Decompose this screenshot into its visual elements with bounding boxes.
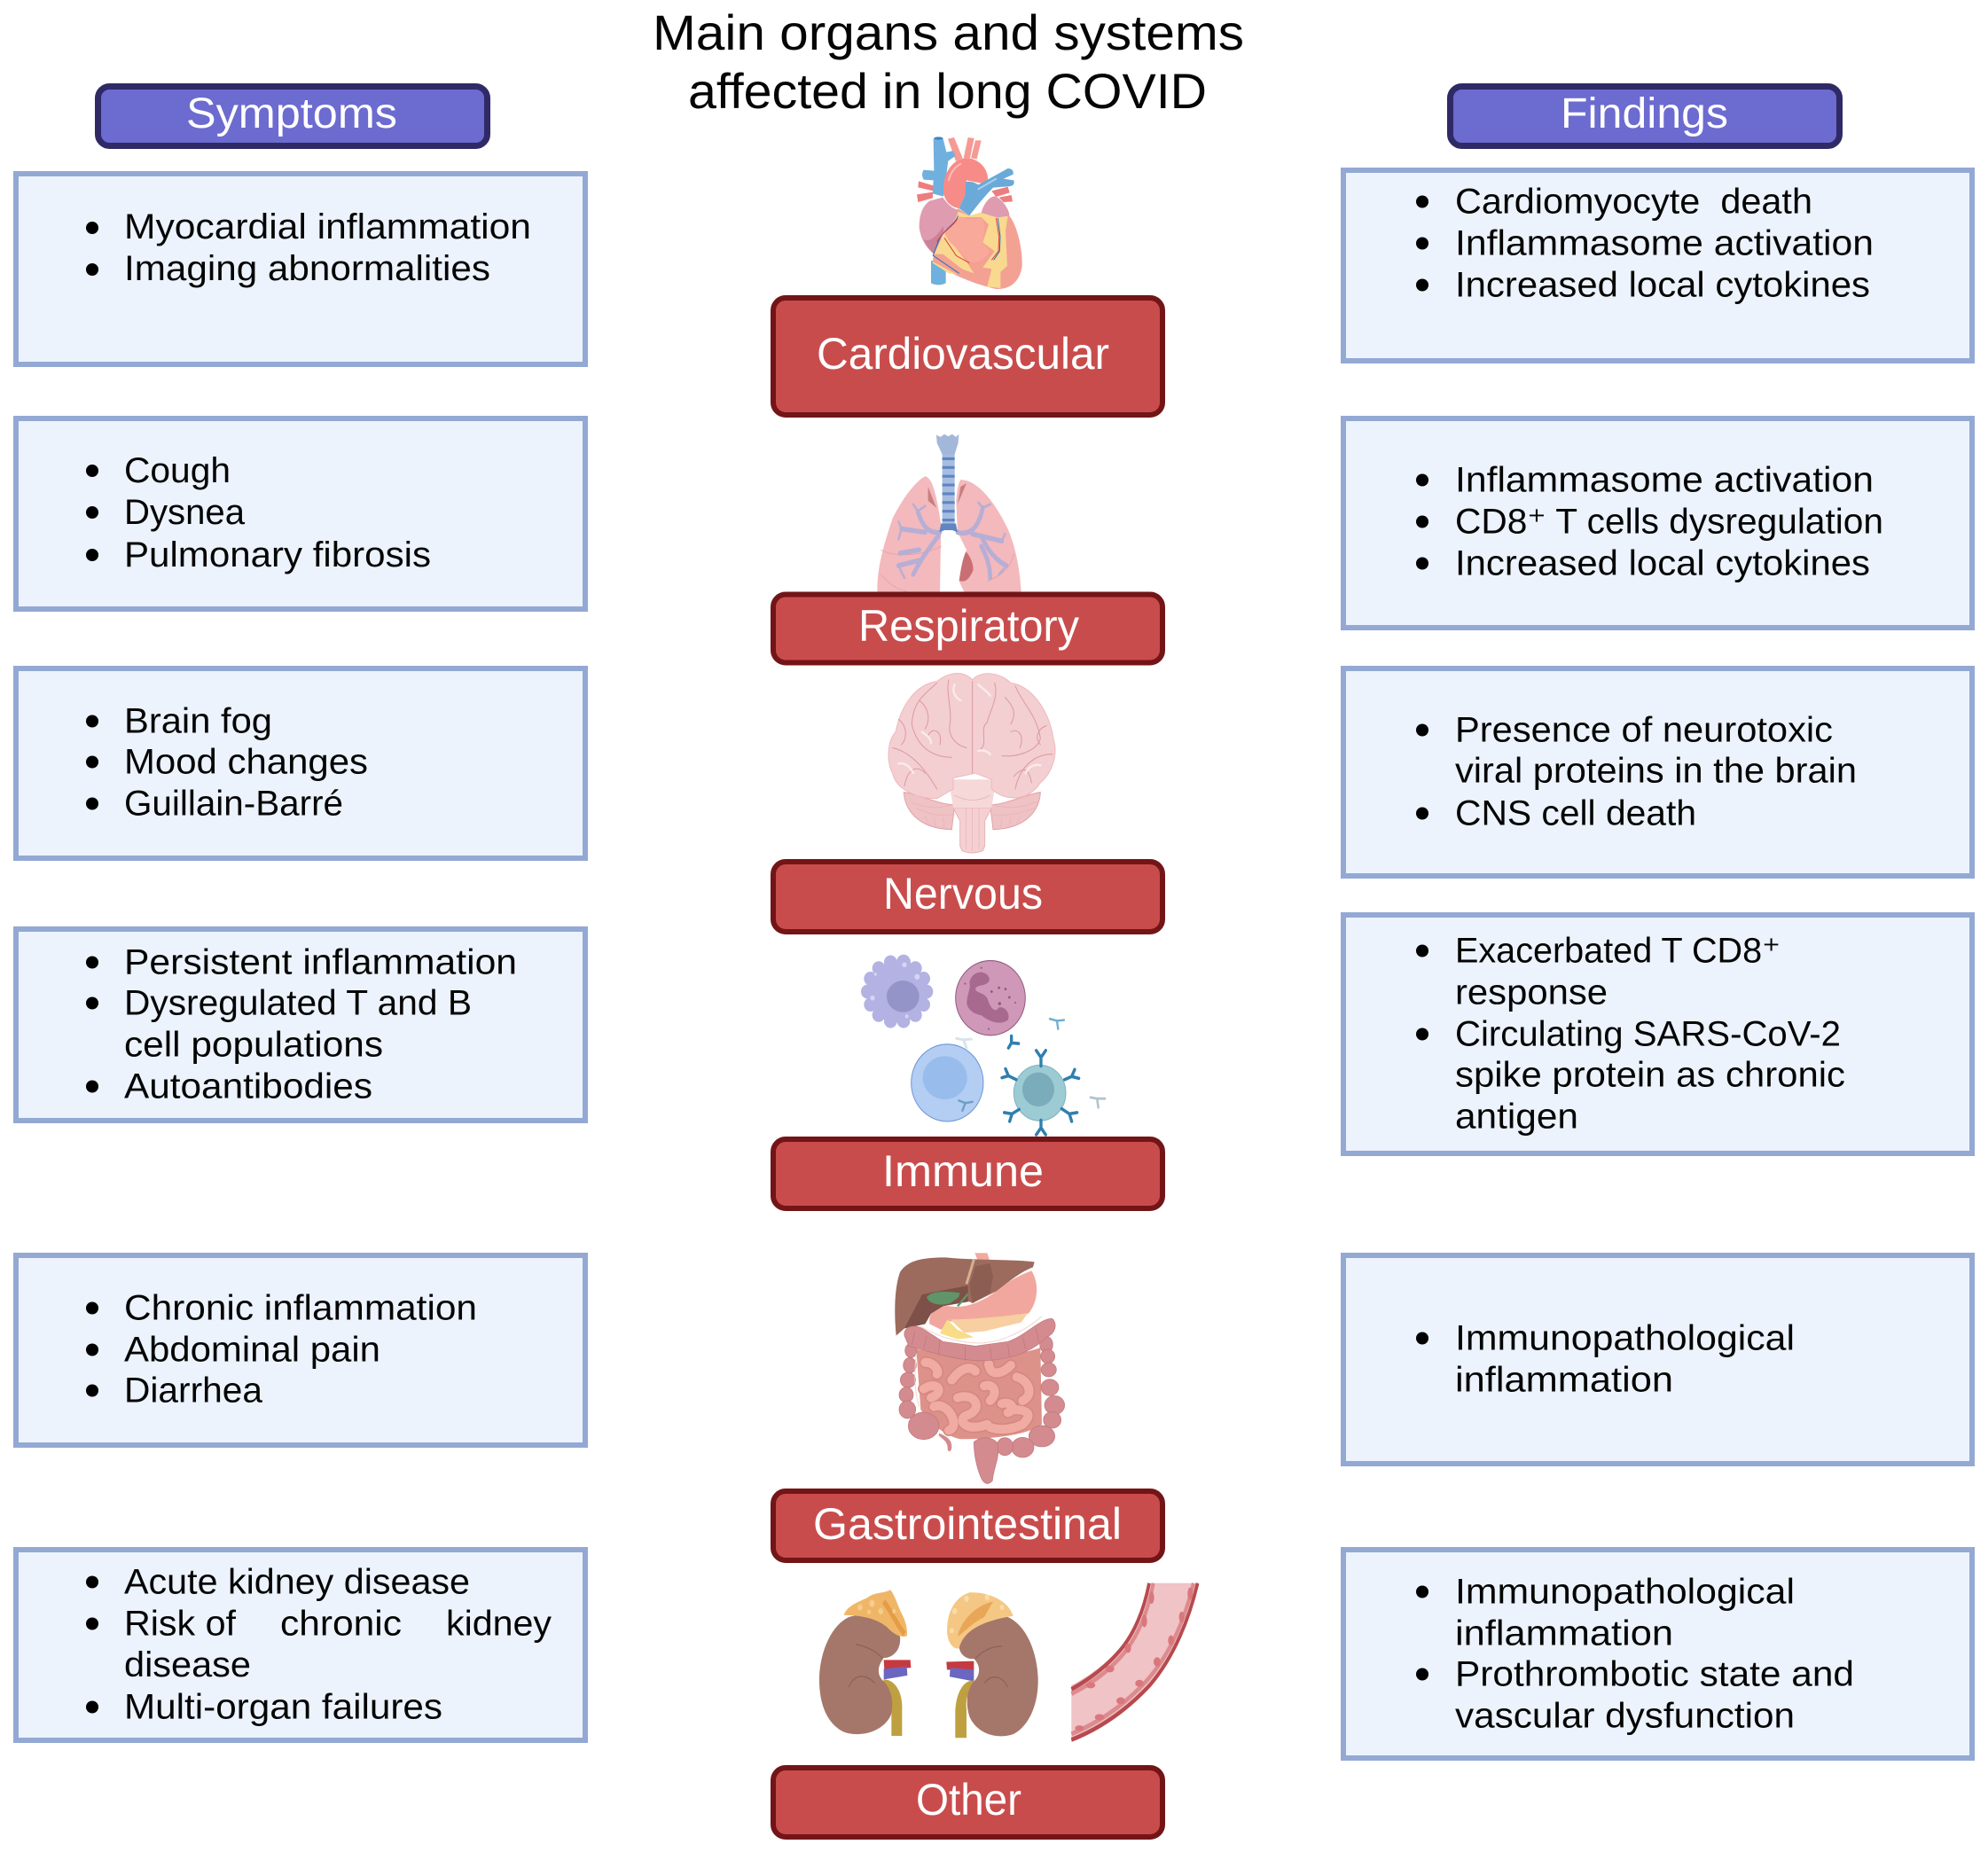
panel: other symptoms: disease: [124, 1645, 251, 1684]
panel: immune findings: spike protein as chronic: [1455, 1055, 1845, 1094]
left adrenal gland: [844, 1590, 907, 1637]
right adrenal gland: [947, 1592, 1014, 1649]
panel: cardiovascular findings: Cardiomyocyte death: [1455, 183, 1812, 222]
liver and gallbladder: [895, 1257, 1035, 1336]
panel: other findings: [1343, 1550, 1972, 1758]
panel: immune findings: [1343, 915, 1972, 1153]
right kidney: [959, 1616, 1038, 1736]
cell: plasma cell: [1014, 1065, 1066, 1121]
large intestine: [899, 1318, 1065, 1483]
panel: immune symptoms: Persistent inflammation: [124, 943, 517, 982]
panel: nervous symptoms: [16, 668, 585, 858]
panel: other findings: Prothrombotic state and: [1455, 1654, 1854, 1693]
label: Immune: [773, 1139, 1162, 1208]
stomach and pancreas: [929, 1270, 1037, 1340]
panel: nervous symptoms: Mood changes: [124, 743, 368, 782]
label: Respiratory: [773, 594, 1162, 663]
label: Cardiovascular: Cardiovascular: [817, 329, 1109, 379]
cell: macrophage: [861, 955, 933, 1028]
panel: respiratory symptoms: Dysnea: [124, 493, 246, 532]
panel: respiratory findings: [1343, 418, 1972, 628]
antibodies: [957, 1019, 1105, 1135]
panel: respiratory symptoms: Cough: [124, 451, 231, 490]
panel: cardiovascular symptoms: [16, 174, 585, 364]
panel: cardiovascular symptoms: Myocardial inflammation: [124, 207, 531, 246]
panel: nervous findings: CNS cell death: [1455, 794, 1696, 833]
panel: immune symptoms: cell populations: [124, 1025, 383, 1064]
panel: nervous findings: Presence of neurotoxic: [1455, 711, 1833, 750]
panel: other symptoms: Multi-organ failures: [124, 1688, 442, 1727]
panel: immune symptoms: [16, 929, 585, 1121]
panel: gastrointestinal symptoms: Diarrhea: [124, 1371, 263, 1410]
panel: other findings: inflammation: [1455, 1614, 1673, 1653]
label: Respiratory: Respiratory: [858, 601, 1079, 651]
panel: gastrointestinal symptoms: Chronic inflammation: [124, 1289, 477, 1328]
panel: other symptoms: Acute kidney disease: [124, 1562, 470, 1601]
panel: immune findings: response: [1455, 973, 1608, 1012]
panel: respiratory findings: CD8⁺ T cells dysregulation: [1455, 502, 1883, 541]
panel: other symptoms: [16, 1550, 585, 1740]
panel: other findings: vascular dysfunction: [1455, 1697, 1795, 1736]
heading: Symptoms: Symptoms: [186, 90, 397, 137]
panel: respiratory symptoms: Pulmonary fibrosis: [124, 535, 431, 574]
panel: immune findings: Exacerbated T CD8⁺: [1455, 931, 1781, 970]
heading: Findings: Findings: [1561, 90, 1728, 137]
cell: neutrophil: [956, 961, 1025, 1035]
title: [653, 4, 1244, 119]
label: Gastrointestinal: [773, 1491, 1162, 1560]
panel: immune findings: antigen: [1455, 1098, 1578, 1137]
panel: cardiovascular findings: Inflammasome activation: [1455, 223, 1874, 262]
panel: nervous findings: viral proteins in the brain: [1455, 752, 1857, 791]
vessels right: [946, 1661, 975, 1738]
icon: heart: [917, 137, 1022, 289]
cell: lymphocyte: [912, 1044, 983, 1121]
vessels left: [882, 1660, 911, 1736]
panel: gastrointestinal symptoms: [16, 1255, 585, 1445]
panel: nervous findings: [1343, 668, 1972, 876]
panel: nervous symptoms: Guillain-Barré: [124, 784, 343, 823]
panel: cardiovascular findings: [1343, 170, 1972, 361]
heading: Symptoms: [98, 87, 488, 145]
panel: immune symptoms: Dysregulated T and B: [124, 984, 472, 1023]
icon: lungs: [877, 434, 1021, 592]
icon: brain: [888, 674, 1055, 853]
panel: immune symptoms: Autoantibodies: [124, 1067, 372, 1106]
panel: other symptoms: chronic: [280, 1605, 402, 1644]
panel: gastrointestinal findings: inflammation: [1455, 1360, 1673, 1399]
panel: other symptoms: kidney: [446, 1605, 552, 1644]
panel: cardiovascular symptoms: Imaging abnormalities: [124, 249, 490, 288]
icon: blood vessel: [1071, 1583, 1199, 1742]
title: affected in long COVID: [688, 63, 1207, 119]
label: Other: [773, 1768, 1162, 1837]
panel: other findings: Immunopathological: [1455, 1573, 1795, 1612]
label: Other: Other: [916, 1775, 1021, 1825]
label: Nervous: Nervous: [883, 869, 1043, 918]
label: Cardiovascular: [773, 298, 1162, 415]
small intestine: [916, 1348, 1042, 1439]
label: Nervous: [773, 862, 1162, 932]
heading: Findings: [1451, 87, 1839, 145]
panel: cardiovascular findings: Increased local cytokines: [1455, 266, 1870, 305]
label: Immune: Immune: [882, 1146, 1044, 1196]
icon: digestive system: [895, 1253, 1065, 1483]
label: Gastrointestinal: Gastrointestinal: [813, 1499, 1122, 1549]
panel: other symptoms: Risk of: [124, 1605, 237, 1644]
panel: gastrointestinal findings: [1343, 1255, 1972, 1464]
icon: immune cells: [861, 955, 1105, 1135]
title: Main organs and systems: [653, 4, 1244, 60]
panel: gastrointestinal findings: Immunopathological: [1455, 1319, 1795, 1358]
panel: immune findings: Circulating SARS-CoV-2: [1455, 1014, 1841, 1053]
panel: respiratory symptoms: [16, 418, 585, 609]
panel: respiratory findings: Increased local cytokines: [1455, 544, 1870, 583]
icon: kidneys: [819, 1590, 1038, 1738]
panel: gastrointestinal symptoms: Abdominal pain: [124, 1330, 380, 1369]
panel: respiratory findings: Inflammasome activation: [1455, 461, 1874, 500]
left kidney: [819, 1615, 900, 1734]
panel: nervous symptoms: Brain fog: [124, 702, 272, 741]
